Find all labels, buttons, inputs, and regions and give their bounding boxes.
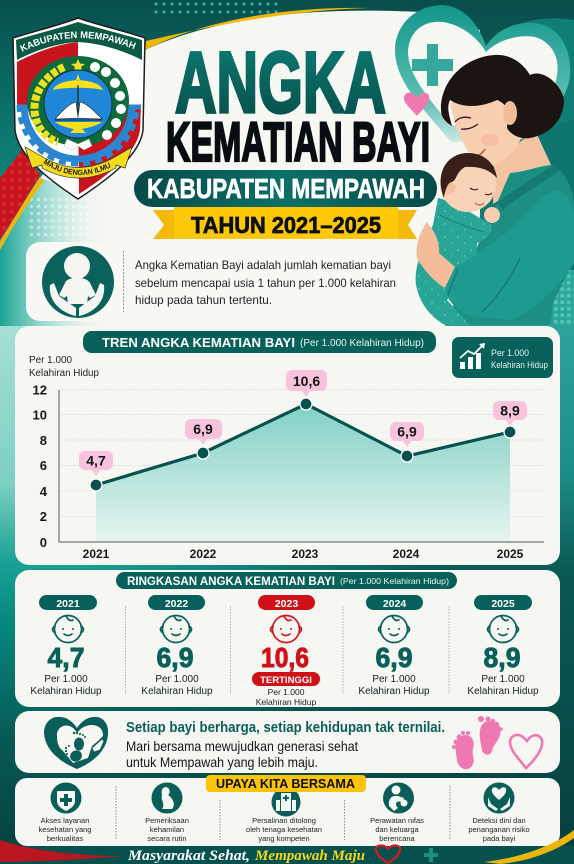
message text: Mari bersama mewujudkan generasi sehat [126,738,358,754]
summary 2023: 10,6 [261,642,309,673]
logo ribbon: MAJU DENGAN ILMU [44,159,110,176]
intro text: hidup pada tahun tertentu. [135,293,272,307]
y axis labels [33,382,48,550]
summary 2025: 2025 [491,598,515,610]
x axis labels: 2025 [497,547,524,561]
upaya item 1: kesehatan yang [39,825,91,834]
chart heading: (Per 1.000 Kelahiran Hidup) [300,338,424,349]
teal swoosh top right [480,18,574,170]
logo name: KABUPATEN MEMPAWAH [20,31,136,52]
summary heading: RINGKASAN ANGKA KEMATIAN BAYI [127,574,335,588]
icon: heart with footprint [44,717,108,769]
summary 2022: Kelahiran Hidup [141,686,213,697]
callouts: 6,9 [193,421,213,437]
area under line [96,404,510,542]
summary 2021: 2021 [56,598,80,610]
title: ANGKA [175,35,386,131]
footer slogan: Masyarakat Sehat, [127,848,250,864]
callouts: 10,6 [293,373,320,389]
summary 2023: 2023 [275,598,298,610]
panel: summary [15,570,560,707]
intro panel [26,242,438,321]
axes [59,390,544,542]
intro text: Angka Kematian Bayi adalah jumlah kematian bayi [135,258,391,272]
mother face [450,90,522,167]
data points [90,398,516,491]
illustration: mother and baby [416,55,574,326]
logo umbrella [53,80,103,90]
y axis labels: 10 [33,408,47,422]
y axis labels: 6 [40,458,47,473]
summary 2023: Kelahiran Hidup [256,697,317,707]
summary 2021: 4,7 [48,642,84,673]
upaya item 3 [246,788,322,843]
pill: kabupaten mempawah: KABUPATEN MEMPAWAH [147,173,425,204]
upaya item 5: pada bayi [483,834,516,843]
logo green ring [27,56,129,146]
upaya item 3: yang kompeten [258,834,310,843]
summary 2024: Kelahiran Hidup [358,686,430,697]
red and yellow swoosh left [0,150,44,250]
upaya item 2: Pemeriksaan [145,816,189,825]
upaya item 5: penanganan risiko [468,825,530,834]
icon: pink heart [404,93,429,116]
upaya item 1: berkualitas [47,834,83,843]
upaya item 3: oleh tenaga kesehatan [246,825,322,834]
icon: pink footprints and heart [452,716,542,769]
icon: baby in hands [42,246,114,318]
ribbon: tahun [153,207,417,239]
upaya item 2 [145,782,189,843]
intro text: sebelum mencapai usia 1 tahun per 1.000 kelahiran [135,276,396,290]
message text: Setiap bayi berharga, setiap kehidupan tak ternilai. [126,719,445,736]
halftone back panel [553,270,574,326]
collar [497,165,560,210]
baby hand [484,207,500,223]
title [166,35,430,173]
logo gear [17,105,141,163]
logo star [71,59,85,72]
summary 2024 [358,595,430,697]
heading: upaya kita bersama: UPAYA KITA BERSAMA [216,776,356,791]
footer band [0,830,574,864]
logo wreath [34,67,64,142]
y axis labels: 12 [33,382,47,398]
logo bow [64,139,92,150]
logo shield [12,17,146,200]
upaya item 5: Deteksi dini dan [472,816,526,825]
summary heading: (Per 1.000 Kelahiran Hidup) [340,576,449,586]
mother forearm [417,222,455,288]
upaya item 1: Akses layanan [41,816,89,825]
x axis labels: 2021 [83,547,110,561]
axis title: Per 1.000 [29,355,72,366]
summary heading [116,572,457,589]
chart heading: TREN ANGKA KEMATIAN BAYI [102,335,295,350]
summary 2025: Kelahiran Hidup [467,686,539,697]
footer slogan: Mempawah Maju [254,848,365,864]
summary 2021: Kelahiran Hidup [30,686,102,697]
summary 2023: Per 1.000 [268,687,305,697]
panel: upaya [15,778,560,846]
message text: untuk Mempawah yang lebih maju. [126,754,318,770]
message text [126,719,445,770]
upaya item 4: berencana [379,834,416,843]
legend box: Per 1.000 [491,348,529,358]
teal shade behind [536,120,574,270]
ribbon: tahun: TAHUN 2021–2025 [191,212,381,238]
pill: kabupaten mempawah [134,170,437,207]
callouts: 6,9 [397,424,417,440]
mother ear [503,101,517,125]
upaya item 4: dan keluarga [375,825,420,834]
logo dish [55,122,102,133]
baby arm fold [440,215,484,232]
logo blue circle [44,70,112,138]
legend box: Kelahiran Hidup [491,360,548,370]
intro text [135,258,396,307]
y axis labels: 0 [40,535,47,550]
summary 2022 [141,595,213,697]
upaya item 4: Perawatan nifas [370,816,424,825]
trend line [96,404,510,485]
axis title [29,355,99,379]
summary 2022: 6,9 [156,642,194,673]
legend box [452,337,553,378]
baby head [440,156,496,212]
callouts: 8,9 [500,402,520,418]
x axis labels [83,547,524,561]
summary 2022: 2022 [165,598,188,610]
upaya item 2: kehamilan [150,825,184,834]
summary 2024: Per 1.000 [372,674,416,685]
summary 2025: 8,9 [484,642,520,673]
callouts [79,370,527,476]
x axis labels: 2022 [190,547,217,561]
upaya item 2: secara rutin [147,834,187,843]
icon: footer heart [376,845,400,863]
logo book [55,102,102,119]
y axis labels: 4 [40,484,48,499]
summary 2022: Per 1.000 [155,674,199,685]
summary 2023: TERTINGGI [260,675,312,686]
white hero area [0,11,480,326]
heart emblem [395,5,570,142]
mother hair [441,55,564,138]
footer slogan [127,848,365,864]
upaya item 3: Persalinan ditolong [252,816,316,825]
summary 2024: 6,9 [376,642,412,673]
logo upper fields [17,42,78,105]
gridlines [59,390,544,516]
panel: message [15,711,560,773]
callouts: 4,7 [86,452,106,468]
mother torso [445,165,574,325]
x axis labels: 2023 [292,547,319,561]
logo cotton [90,62,126,140]
summary 2021 [30,595,102,697]
top halftone dots [150,0,280,16]
logo banner [16,22,142,60]
y axis labels: 2 [40,509,47,524]
summary 2025: Per 1.000 [481,674,525,685]
summary 2024: 2024 [383,598,406,610]
baby body and legs [416,198,492,325]
panel: trend chart [15,326,560,565]
chart heading [83,331,436,353]
logo ribbon [24,146,133,178]
x axis labels: 2024 [393,547,420,561]
icon: footer plus [424,848,438,862]
summary 2025 [467,595,539,697]
upaya item 4 [370,782,424,843]
y axis labels: 8 [40,433,47,448]
upaya item 1 [39,782,91,843]
neck [493,130,552,204]
axis title: Kelahiran Hidup [29,368,99,379]
upaya item 5 [468,782,530,843]
summary 2021: Per 1.000 [44,674,88,685]
yellow arc [145,8,370,50]
mother sleeve [445,190,574,320]
summary 2023 [252,595,320,707]
